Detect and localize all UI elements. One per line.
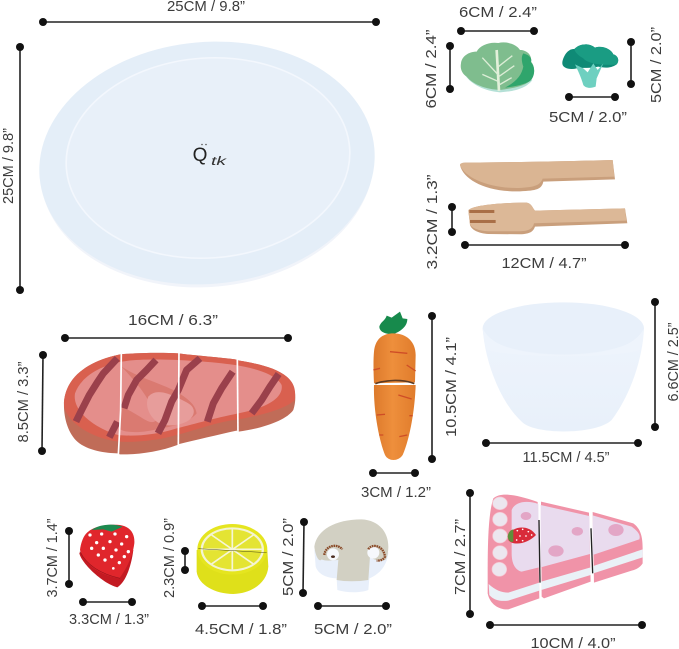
dimension: carrot height (428, 312, 460, 463)
broccoli (562, 44, 618, 88)
strawberry (79, 525, 134, 587)
dimension: fork width (461, 241, 629, 272)
cake slice 2 (541, 502, 591, 598)
dimension: plate height: 25CM / 9.8” (0, 128, 17, 204)
steak (64, 352, 295, 455)
lemon (197, 524, 268, 594)
dimension: cake height (452, 489, 474, 618)
dimension: bowl height (651, 298, 679, 431)
bowl (483, 302, 644, 431)
dimension: lettuce height: 6CM / 2.4” (423, 30, 440, 108)
dimension: mushroom width: 5CM / 2.0” (314, 621, 392, 638)
dimension: mushroom width (314, 602, 392, 638)
dimension: cake height: 7CM / 2.7” (452, 519, 469, 595)
dimension: strawberry width: 3.3CM / 1.3” (69, 611, 149, 628)
dimension: strawberry height (44, 518, 73, 598)
dimension: steak width (61, 312, 292, 342)
dimension: broccoli height: 5CM / 2.0” (648, 27, 665, 103)
dimension: lemon height (161, 518, 189, 598)
dimension: carrot width (361, 469, 431, 501)
dimension: fork height: 3.2CM / 1.3” (424, 174, 441, 270)
plate logo: Q (193, 145, 207, 166)
lettuce (461, 42, 534, 92)
cake (488, 495, 643, 609)
dimension: broccoli width (549, 93, 627, 126)
dimension: fork height (424, 174, 456, 270)
dimension: bowl width (482, 439, 642, 466)
dimension: steak width: 16CM / 6.3” (128, 312, 218, 329)
dimension: bowl width: 11.5CM / 4.5” (522, 449, 610, 466)
dimension: mushroom height (280, 518, 308, 597)
carrot (373, 312, 416, 460)
dimension: lemon width (195, 602, 287, 638)
dimension: lettuce height (423, 30, 454, 108)
cake slice 3 (593, 512, 643, 583)
dimension: fork width: 12CM / 4.7” (502, 255, 586, 272)
dimension: lemon height: 2.3CM / 0.9” (161, 518, 178, 598)
plate (29, 28, 385, 301)
dimension: lettuce width (457, 4, 538, 35)
cake slice 1 (488, 495, 539, 609)
mushroom (314, 519, 388, 592)
dimension: plate height (0, 43, 24, 294)
plate logo: tk (211, 154, 228, 168)
dimension: carrot width: 3CM / 1.2” (361, 484, 431, 501)
dimension: broccoli height (627, 27, 665, 103)
knife (460, 160, 615, 191)
dimension: carrot height: 10.5CM / 4.1” (443, 337, 460, 437)
dimension: mushroom height: 5CM / 2.0” (280, 518, 297, 596)
dimension: strawberry width (69, 598, 149, 628)
dimension: steak height: 8.5CM / 3.3” (15, 361, 32, 442)
dimension: strawberry height: 3.7CM / 1.4” (44, 518, 61, 598)
fork (468, 203, 627, 234)
dimension: lemon width: 4.5CM / 1.8” (195, 621, 287, 638)
dimension: lettuce width: 6CM / 2.4” (459, 4, 537, 21)
dimension: plate width (39, 0, 380, 26)
dimension: broccoli width: 5CM / 2.0” (549, 109, 627, 126)
dimension: steak height (15, 351, 47, 455)
dimension: cake width (486, 621, 646, 649)
plate logo (193, 144, 228, 168)
